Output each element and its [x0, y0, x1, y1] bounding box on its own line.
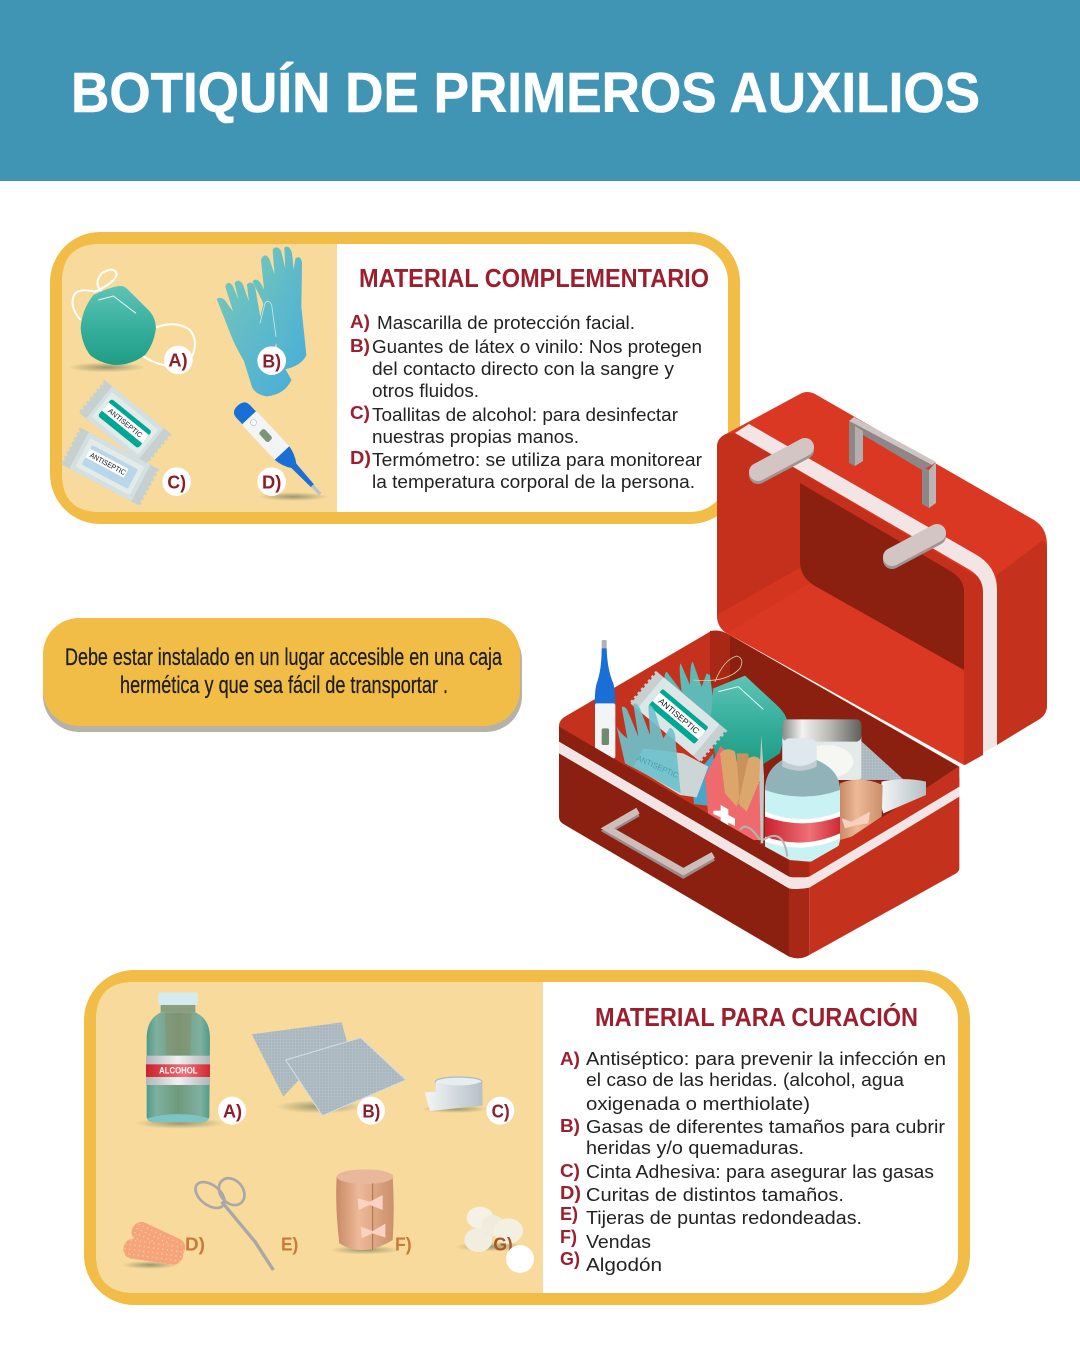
icon: cotton: [455, 1207, 525, 1252]
list: material para curación: D): [560, 1182, 581, 1203]
item: wipe packet: [631, 672, 726, 761]
item: red pouch: [705, 746, 763, 840]
list: material complementario: A): [350, 311, 370, 332]
item: front gloves: [617, 703, 681, 793]
item: scissors: [740, 735, 787, 857]
icon: gauze pads: [252, 1022, 406, 1116]
icon: alcohol bottle: ALCOHOL: [159, 1066, 198, 1076]
item: thermometer: [595, 640, 615, 758]
label: D: D): [185, 1233, 205, 1254]
callout: storage note: [43, 618, 522, 732]
list: material para curación: E): [560, 1203, 578, 1224]
badge: C: [486, 1097, 514, 1125]
list: material complementario: Toallitas de alcohol: para desinfectar: [372, 404, 678, 425]
list: material para curación: Gasas de diferentes tamaños para cubrir: [586, 1116, 945, 1137]
header band: [0, 0, 1080, 181]
icon: gloves: [218, 248, 305, 395]
list: material para curación: Algodón: [586, 1254, 662, 1275]
item: plasters: [720, 749, 762, 812]
icon: alcohol wipes: ANTISEPTIC: [106, 406, 145, 440]
label: E: E): [281, 1233, 298, 1254]
item: blue patch behind packet: [692, 753, 715, 807]
list: material para curación: [560, 1048, 946, 1275]
list: material complementario: nuestras propias manos.: [372, 426, 579, 447]
list: material complementario: Termómetro: se utiliza para monitorear: [372, 449, 702, 470]
list: material para curación: Tijeras de puntas redondeadas.: [586, 1207, 862, 1228]
kit front handle: [607, 811, 713, 875]
badge: D: [257, 467, 286, 496]
list: material complementario: Guantes de látex o vinilo: Nos protegen: [372, 336, 702, 357]
list: material para curación: G): [560, 1248, 580, 1269]
label: G with badge: [493, 1233, 534, 1273]
icon: plasters: [122, 1219, 188, 1269]
badge: C: [162, 467, 191, 496]
badge: C: C): [492, 1100, 510, 1121]
list: material para curación: Curitas de distintos tamaños.: [586, 1184, 844, 1205]
list: material complementario: Mascarilla de protección facial.: [377, 312, 635, 333]
item: mask: [693, 656, 787, 764]
list: material para curación: el caso de las heridas. (alcohol, agua: [586, 1069, 905, 1090]
panel: material complementario: [56, 238, 734, 518]
list: material complementario: C): [350, 402, 370, 423]
badge: B: B): [362, 1100, 380, 1121]
lid handle: [849, 417, 936, 508]
kit interior: [730, 635, 958, 860]
latch top: [758, 447, 805, 475]
callout: storage note: Debe estar instalado en un lugar accesible en una caja: [65, 644, 502, 671]
icon: alcohol wipes: [62, 381, 170, 505]
heading: material para curación: MATERIAL PARA CURACIÓN: [595, 1002, 918, 1032]
label: F: F): [395, 1233, 412, 1254]
kit base rim: [559, 631, 959, 877]
list: material complementario: [350, 311, 702, 492]
latch bottom: [892, 533, 937, 560]
kit lid: [717, 392, 1047, 765]
list: material para curación: Antiséptico: para prevenir la infección en: [586, 1048, 946, 1069]
badge: B: [357, 1097, 385, 1125]
item: front gloves: ANTISEPTIC: [635, 754, 680, 780]
callout: storage note: hermética y que sea fácil de transportar .: [120, 672, 448, 699]
heading: material complementario: MATERIAL COMPLEMENTARIO: [359, 263, 709, 293]
item: gloves behind: [664, 662, 714, 733]
badge: A: [218, 1097, 246, 1125]
list: material para curación: C): [560, 1160, 580, 1181]
panel: material para curación: [90, 976, 964, 1299]
item: antiseptic bottle: [765, 738, 840, 862]
title: BOTIQUÍN DE PRIMEROS AUXILIOS: [71, 61, 980, 125]
list: material complementario: B): [350, 335, 370, 356]
list: material para curación: oxigenada o merthiolate): [586, 1093, 810, 1114]
list: material para curación: heridas y/o quemaduras.: [586, 1137, 804, 1158]
illustrations: complementary items: [62, 248, 328, 505]
illustration: first aid kit: [559, 392, 1047, 958]
badge: C: C): [167, 471, 186, 492]
icon: elastic bandage: [330, 1169, 400, 1254]
item: tape: [880, 779, 926, 813]
badge: A: A): [223, 1100, 242, 1121]
badge: B: [257, 346, 286, 375]
lid strap: [735, 424, 997, 753]
list: material para curación: B): [560, 1115, 580, 1136]
icon: adhesive tape: [422, 1077, 488, 1113]
label: G with badge: G): [493, 1233, 513, 1254]
badge: A: A): [168, 350, 188, 371]
badge: B: B): [262, 350, 281, 371]
list: material complementario: la temperatura corporal de la persona.: [372, 471, 695, 492]
icon: face mask: [68, 270, 195, 372]
item: second packet: [633, 748, 708, 797]
badge: D: D): [262, 471, 281, 492]
item: bandage: [840, 780, 883, 840]
list: material para curación: F): [560, 1226, 577, 1247]
list: material para curación: A): [560, 1048, 580, 1069]
list: material complementario: del contacto directo con la sangre y: [372, 358, 675, 379]
icon: thermometer: [230, 399, 328, 501]
kit front walls: [559, 727, 959, 958]
list: material para curación: Vendas: [586, 1231, 651, 1252]
item: gauze: [860, 740, 904, 780]
badge: A: [164, 346, 193, 374]
icon: scissors: [191, 1173, 273, 1270]
item: wipe packet: ANTISEPTIC: [657, 696, 701, 736]
list: material complementario: D): [350, 447, 371, 468]
list: material complementario: otros fluidos.: [372, 380, 479, 401]
list: material para curación: Cinta Adhesiva: para asegurar las gasas: [586, 1161, 934, 1182]
icon: alcohol bottle: [135, 992, 225, 1129]
illustrations: wound-care items: [122, 992, 534, 1273]
item: jar: [782, 719, 861, 780]
icon: alcohol wipes: ANTISEPTIC: [88, 451, 128, 477]
